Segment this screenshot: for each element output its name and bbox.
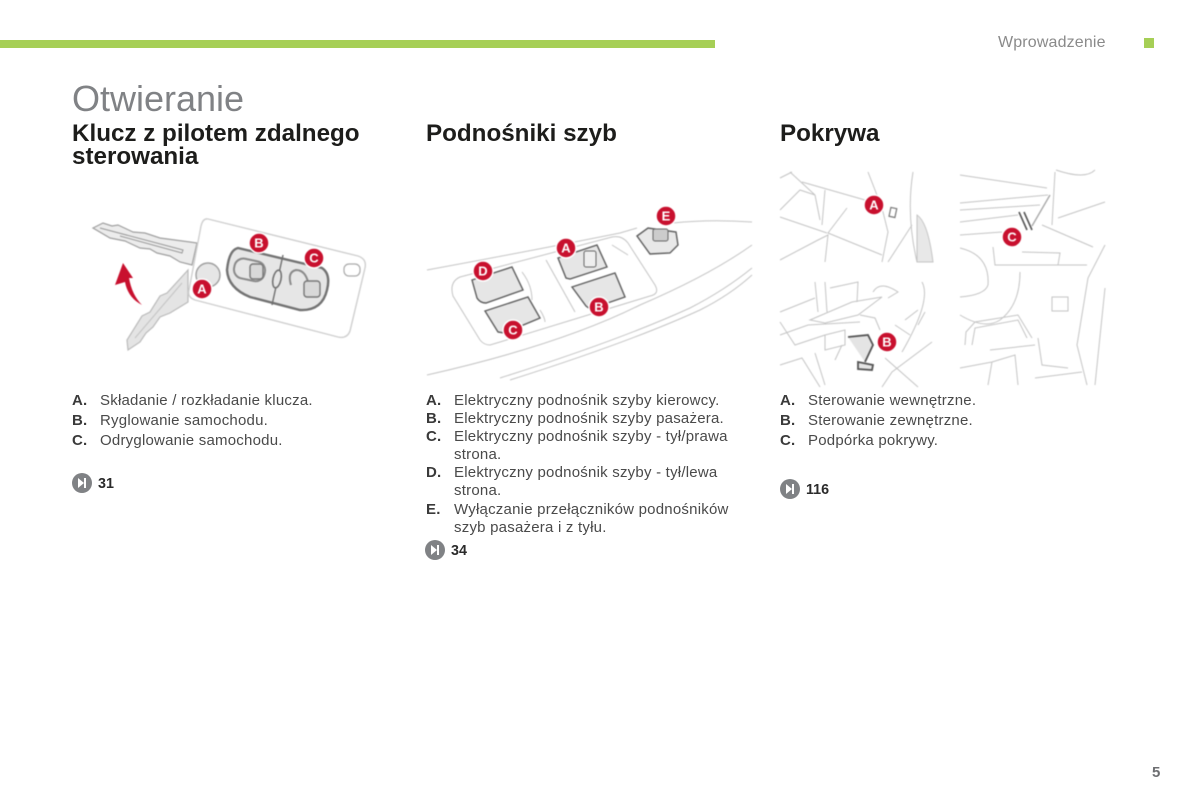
button panel	[227, 248, 328, 310]
legend: key: C.	[72, 432, 87, 449]
folded key blade	[93, 223, 197, 265]
legend: windows	[426, 392, 729, 536]
marker B	[877, 332, 897, 352]
marker D	[473, 261, 493, 281]
legend: windows: Elektryczny podnośnik szyby pasażera.	[454, 410, 724, 427]
switch E	[637, 228, 678, 254]
switch B	[572, 273, 625, 309]
legend: bonnet: Sterowanie zewnętrzne.	[808, 412, 973, 429]
view A	[780, 172, 933, 262]
view B	[780, 282, 932, 387]
illustration: bonnet release	[780, 170, 1105, 387]
legend: bonnet: Sterowanie wewnętrzne.	[808, 392, 976, 409]
marker A	[192, 279, 212, 299]
heading: key: sterowania	[72, 142, 198, 170]
marker C	[304, 248, 324, 268]
marker B: B	[594, 300, 604, 315]
legend: key: B.	[72, 412, 87, 429]
marker B	[249, 233, 269, 253]
marker B	[589, 297, 609, 317]
legend: windows: C.	[426, 428, 441, 445]
top green bar	[0, 40, 715, 48]
view C	[960, 170, 1105, 385]
switch D	[472, 267, 523, 303]
legend: windows: Elektryczny podnośnik szyby - tył/prawa	[454, 428, 728, 445]
page reference 31: 31	[98, 476, 114, 492]
marker C: C	[309, 251, 319, 266]
page reference 116	[780, 479, 829, 499]
legend: windows: Wyłączanie przełączników podnośników	[454, 501, 729, 518]
marker C	[1002, 227, 1022, 247]
marker A: A	[561, 241, 571, 256]
heading: bonnet: Pokrywa	[780, 120, 880, 147]
legend: key: Ryglowanie samochodu.	[100, 412, 268, 429]
marker A	[864, 195, 884, 215]
red arrow	[115, 263, 142, 305]
legend: bonnet: A.	[780, 392, 795, 409]
marker E	[656, 206, 676, 226]
marker B: B	[882, 335, 892, 350]
marker A: A	[197, 282, 207, 297]
marker D: D	[478, 264, 488, 279]
page reference 34: 34	[451, 543, 467, 559]
marker A: A	[869, 198, 879, 213]
legend: bonnet	[780, 392, 976, 449]
unlock icon	[290, 270, 320, 297]
marker E: E	[662, 209, 671, 224]
legend: windows: strona.	[454, 446, 501, 463]
fob hole	[344, 264, 360, 276]
heading: key	[72, 120, 360, 170]
marker B: B	[254, 236, 264, 251]
green square marker	[1144, 38, 1154, 48]
legend: bonnet: C.	[780, 432, 795, 449]
legend: bonnet: Podpórka pokrywy.	[808, 432, 938, 449]
legend: key: A.	[72, 392, 87, 409]
page number: 5	[1152, 764, 1160, 781]
page title: Otwieranie	[72, 78, 244, 119]
legend: key: Składanie / rozkładanie klucza.	[100, 392, 313, 409]
legend: windows: strona.	[454, 482, 501, 499]
legend: key: Odryglowanie samochodu.	[100, 432, 283, 449]
lock icon	[232, 257, 267, 283]
page reference 116: 116	[806, 482, 829, 498]
illustration: window switches	[427, 206, 752, 380]
legend: key	[72, 392, 313, 449]
heading: windows: Podnośniki szyb	[426, 120, 617, 147]
switch A	[558, 245, 607, 279]
page reference 34	[425, 540, 467, 560]
marker C: C	[1007, 230, 1017, 245]
marker C	[503, 320, 523, 340]
switch panel	[452, 237, 657, 345]
switch C	[485, 297, 540, 333]
legend: bonnet: B.	[780, 412, 795, 429]
legend: windows: Elektryczny podnośnik szyby - tył/lewa	[454, 464, 717, 481]
page reference 31	[72, 473, 114, 493]
key fob body	[189, 219, 365, 337]
legend: windows: D.	[426, 464, 441, 481]
open key blade	[127, 270, 188, 350]
marker A	[556, 238, 576, 258]
section name: Wprowadzenie	[998, 34, 1106, 51]
legend: windows: B.	[426, 410, 441, 427]
heading: key: Klucz z pilotem zdalnego	[72, 120, 360, 147]
legend: windows: E.	[426, 501, 441, 518]
legend: windows: szyb pasażera i z tyłu.	[454, 519, 607, 536]
legend: windows: Elektryczny podnośnik szyby kierowcy.	[454, 392, 719, 409]
legend: windows: A.	[426, 392, 441, 409]
illustration: remote key	[93, 219, 365, 350]
marker C: C	[508, 323, 518, 338]
release button	[196, 263, 220, 287]
